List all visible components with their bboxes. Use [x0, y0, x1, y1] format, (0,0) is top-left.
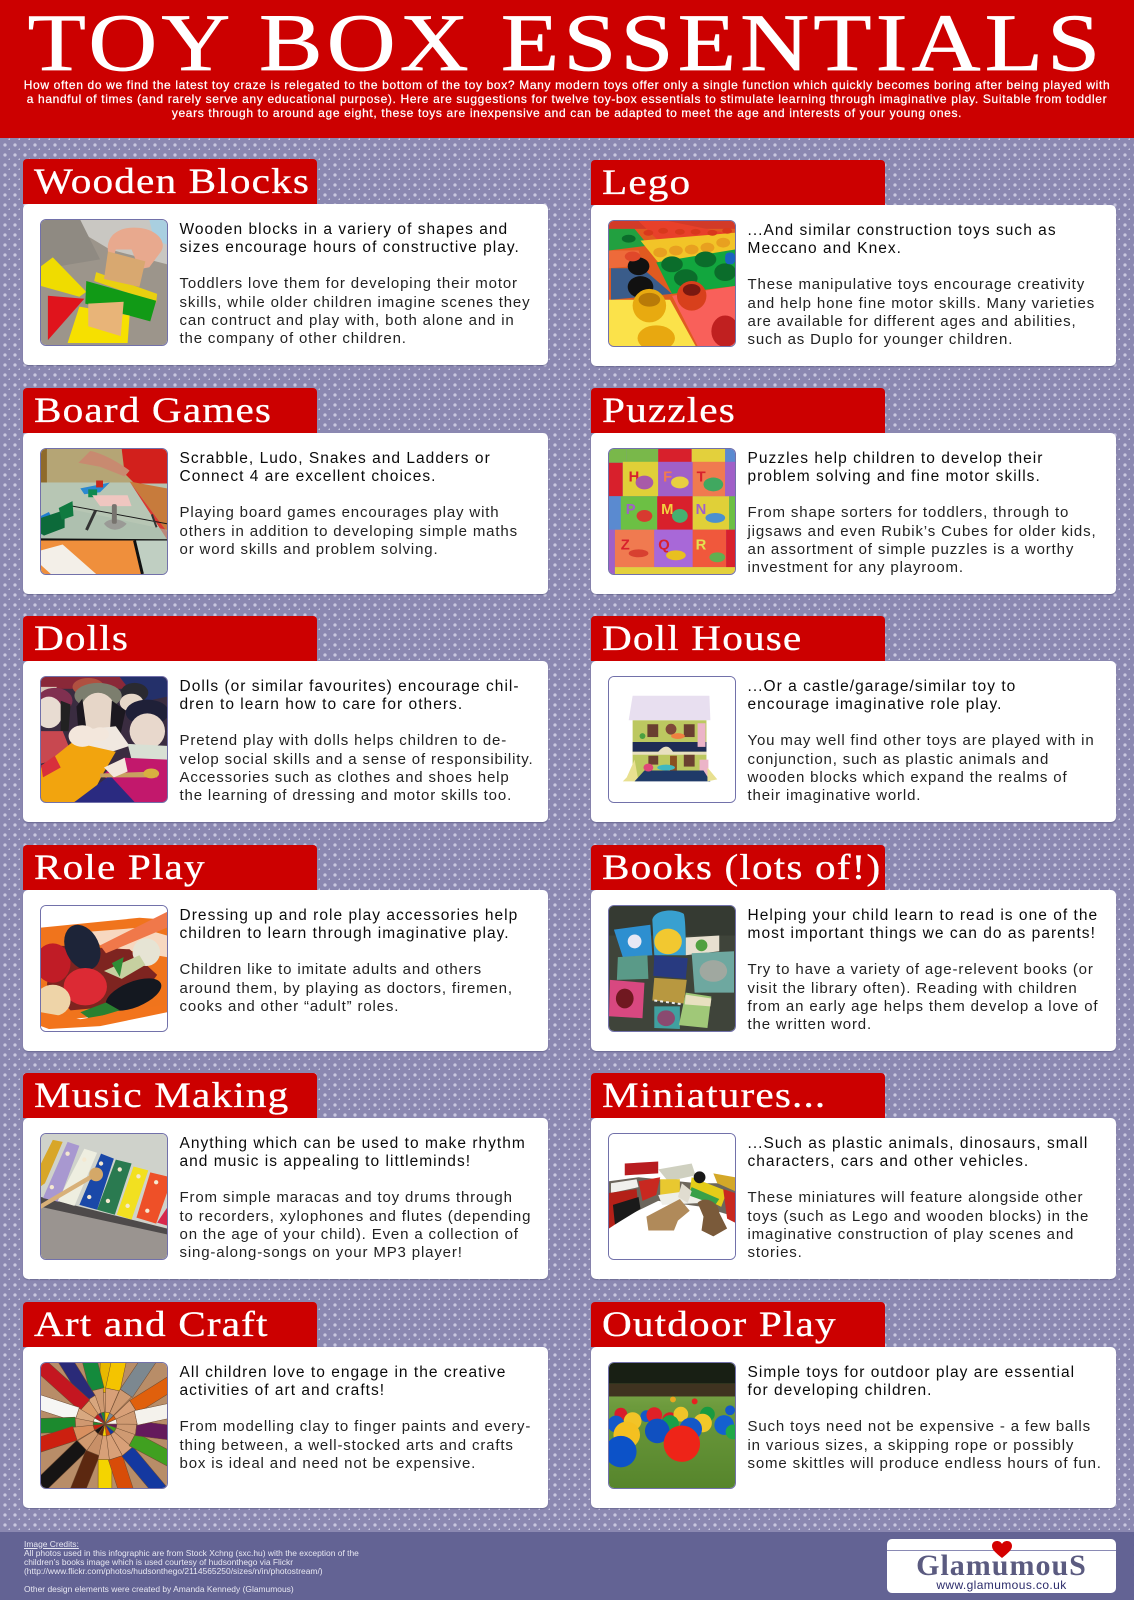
text: Miniatures: stories.: [748, 1244, 803, 1261]
text: Books: most important things we can do as parents!: [748, 925, 1096, 942]
text: Miniatures: ...Such as plastic animals, dinosaurs, small: [748, 1134, 1088, 1152]
text: Art and Craft: thing between, a well-stocked arts and crafts: [180, 1437, 514, 1454]
text: Board Games: Playing board games encourages play with: [180, 504, 500, 521]
photo: foam puzzle mat: M: [661, 502, 673, 518]
text: Music Making: [180, 1134, 531, 1261]
intro text: years through to around age eight, these toys are inexpensive and can be adapted to meet the age and interests of your young ones.: [172, 106, 962, 120]
heading: Books (lots of!): Books (lots of!): [602, 847, 881, 887]
text: Role Play: Children like to imitate adults and others: [180, 961, 482, 978]
heading: Dolls: Dolls: [34, 618, 129, 658]
text: Music Making: on the age of your child). Even a collection of: [180, 1226, 519, 1243]
text: Dolls: Accessories such as clothes and shoes help: [180, 769, 510, 786]
photo: children's books: [608, 905, 736, 1032]
text: Music Making: From simple maracas and toy drums through: [180, 1189, 513, 1206]
photo: xylophone: [40, 1133, 168, 1260]
photo: balls on grass: [608, 1362, 736, 1489]
text: Miniatures: These miniatures will feature alongside other: [748, 1189, 1083, 1206]
heading: Wooden Blocks: Wooden Blocks: [34, 161, 310, 201]
text: Board Games: others in addition to developing simple maths: [180, 523, 518, 540]
heading: Dolls: [23, 616, 317, 661]
text: Wooden Blocks: can contruct and play with, both alone and in: [180, 312, 515, 329]
image credits: children’s books image which is used courtesy of hudsonthego via Flickr: [24, 1557, 293, 1567]
text: Dolls: Dolls (or similar favourites) encourage chil-: [180, 678, 520, 694]
text: Art and Craft: [180, 1364, 531, 1472]
panel: Art and Craft: [22, 1302, 548, 1510]
image credits: [24, 1538, 359, 1594]
text: Miniatures: toys (such as Lego and wooden blocks) in the: [748, 1208, 1089, 1225]
heading: Lego: [591, 160, 885, 205]
text: Art and Craft: All children love to engage in the creative: [180, 1364, 506, 1380]
panel: Books: [590, 845, 1116, 1052]
intro text: a handful of times (and rarely serve any educational purpose). Here are suggestions for twelve toy-box essentials to stimulate learning through imaginative play. Suitable from toddler: [27, 92, 1107, 106]
photo: wooden blocks: [40, 219, 168, 346]
photo: foam puzzle mat: H: [629, 469, 639, 485]
text: Outdoor Play: [748, 1364, 1102, 1472]
logo: Glamumous: [887, 1539, 1116, 1593]
photo: foam puzzle mat: P: [626, 502, 636, 518]
photo: dolls: [40, 676, 168, 803]
text: Dolls: [180, 678, 534, 804]
text: Puzzles: an assortment of simple puzzles is a worthy: [748, 541, 1074, 558]
text: Board Games: or word skills and problem solving.: [180, 541, 439, 558]
text: Role Play: around them, by playing as doctors, firemen,: [180, 980, 513, 997]
footer: [0, 1532, 1134, 1600]
text: Puzzles: [747, 450, 1096, 576]
panel: Board Games: [22, 388, 548, 596]
panel: Dolls: [22, 616, 548, 824]
heading: Lego: Lego: [602, 162, 691, 202]
panel: Puzzles: [590, 388, 1116, 596]
text: Lego: and help hone fine motor skills. Many varieties: [748, 295, 1095, 312]
photo: board game: [40, 448, 168, 575]
text: Puzzles: From shape sorters for toddlers, through to: [748, 504, 1069, 521]
heading: Board Games: Board Games: [34, 390, 272, 430]
text: Music Making: sing-along-songs on your MP3 player!: [180, 1244, 463, 1261]
text: Wooden Blocks: sizes encourage hours of constructive play.: [180, 239, 520, 256]
panel: Outdoor Play: [590, 1302, 1116, 1510]
text: Role Play: cooks and other “adult” roles.: [180, 998, 399, 1015]
text: Outdoor Play: for developing children.: [748, 1382, 932, 1399]
text: Board Games: [180, 450, 518, 558]
photo: play food basket: [40, 905, 168, 1032]
text: Miniatures: imaginative construction of play scenes and: [748, 1226, 1074, 1243]
text: Books: visit the library often). Reading with children: [748, 980, 1078, 997]
image credits: Other design elements were created by Amanda Kennedy (Glamumous): [24, 1584, 294, 1594]
heading: Outdoor Play: Outdoor Play: [602, 1304, 837, 1344]
panel: Lego: [590, 160, 1116, 368]
text: Art and Craft: box is ideal and need not be expensive.: [180, 1455, 476, 1472]
photo: foam puzzle mat: [608, 448, 736, 575]
text: Miniatures: [748, 1134, 1089, 1261]
text: Dolls: dren to learn how to care for others.: [180, 696, 463, 713]
text: Doll House: encourage imaginative role play.: [748, 696, 1002, 713]
text: Doll House: wooden blocks which expand the realms of: [748, 769, 1068, 786]
text: Outdoor Play: Such toys need not be expensive - a few balls: [748, 1418, 1091, 1435]
text: Outdoor Play: Simple toys for outdoor play are essential: [748, 1364, 1075, 1380]
text: Puzzles: investment for any playroom.: [748, 559, 964, 576]
text: Wooden Blocks: Wooden blocks in a variery of shapes and: [180, 220, 508, 238]
text: Role Play: Dressing up and role play accessories help: [180, 906, 518, 924]
header banner: [0, 0, 1134, 138]
text: Outdoor Play: some skittles will produce endless hours of fun.: [748, 1455, 1102, 1472]
photo: toy cars and animals: [608, 1133, 736, 1260]
text: Doll House: their imaginative world.: [748, 787, 921, 804]
text: Books: from an early age helps them develop a love of: [748, 998, 1098, 1015]
text: Lego: ...And similar construction toys such as: [748, 222, 1057, 238]
heading: Role Play: [23, 845, 317, 890]
text: Books: Helping your child learn to read is one of the: [748, 906, 1098, 924]
text: Lego: These manipulative toys encourage creativity: [748, 276, 1085, 293]
photo: foam puzzle mat: F: [663, 469, 672, 485]
text: Puzzles: jigsaws and even Rubik’s Cubes for older kids,: [748, 523, 1096, 540]
text: Music Making: Anything which can be used to make rhythm: [180, 1134, 526, 1152]
heading: Puzzles: Puzzles: [602, 390, 736, 430]
heading: Miniatures...: [591, 1073, 885, 1118]
text: Dolls: velop social skills and a sense of responsibility.: [180, 751, 534, 768]
photo: foam puzzle mat: Q: [658, 537, 670, 553]
heading: Role Play: Role Play: [34, 847, 206, 887]
text: Dolls: the learning of dressing and motor skills too.: [180, 787, 512, 804]
text: Role Play: children to learn through imaginative play.: [180, 925, 510, 942]
heading: Doll House: [591, 616, 885, 661]
heading: Miniatures...: Miniatures...: [602, 1075, 826, 1115]
text: Wooden Blocks: [180, 220, 530, 347]
heading: Art and Craft: Art and Craft: [34, 1304, 269, 1344]
photo: foam puzzle mat: Z: [621, 537, 630, 553]
photo: coloured pencils: [40, 1362, 168, 1489]
text: Doll House: ...Or a castle/garage/similar toy to: [748, 678, 1016, 694]
text: Dolls: Pretend play with dolls helps children to de-: [180, 732, 507, 749]
text: Board Games: Scrabble, Ludo, Snakes and Ladders or: [180, 450, 491, 466]
intro text: [24, 78, 1110, 120]
image credits: (http://www.flickr.com/photos/hudsonthego/2114565250/sizes/n/in/photostream/): [24, 1566, 323, 1576]
text: Music Making: and music is appealing to littleminds!: [180, 1153, 471, 1170]
logo name: GlamumouS: [916, 1549, 1087, 1582]
heading: Doll House: Doll House: [602, 618, 802, 658]
text: Books: Try to have a variety of age-relevent books (or: [748, 961, 1094, 978]
text: Doll House: You may well find other toys are played with in: [748, 732, 1095, 749]
text: Board Games: Connect 4 are excellent choices.: [180, 468, 436, 485]
text: Music Making: to recorders, xylophones and flutes (depending: [180, 1208, 531, 1225]
text: Puzzles: Puzzles help children to develop their: [748, 450, 1043, 466]
text: Miniatures: characters, cars and other vehicles.: [748, 1153, 1029, 1170]
panel: Doll House: [590, 616, 1116, 824]
image credits: All photos used in this infographic are from Stock Xchng (sxc.hu) with the exception of the: [24, 1548, 359, 1558]
intro text: How often do we find the latest toy craze is relegated to the bottom of the toy box? Many modern toys offer only a single function which quickly becomes boring after being played with: [24, 78, 1110, 92]
photo: foam puzzle mat: R: [696, 537, 707, 553]
text: Role Play: [180, 906, 518, 1015]
text: Lego: are available for different ages and abilities,: [748, 313, 1077, 330]
text: Art and Craft: From modelling clay to finger paints and every-: [180, 1418, 531, 1435]
text: Wooden Blocks: skills, while older children imagine scenes they: [180, 294, 530, 311]
text: Lego: Meccano and Knex.: [748, 240, 902, 257]
photo: foam puzzle mat: N: [696, 502, 706, 518]
text: Wooden Blocks: the company of other children.: [180, 330, 407, 347]
panel: Wooden Blocks: [22, 159, 548, 366]
panel: Music Making: [22, 1073, 548, 1280]
image credits: Image Credits:: [24, 1538, 79, 1548]
text: Doll House: [748, 678, 1095, 804]
heading: Music Making: Music Making: [34, 1075, 289, 1115]
text: Outdoor Play: in various sizes, a skipping rope or possibly: [748, 1437, 1074, 1454]
text: Wooden Blocks: Toddlers love them for developing their motor: [180, 275, 518, 292]
text: Art and Craft: activities of art and crafts!: [180, 1382, 385, 1399]
logo url: www.glamumous.co.uk: [936, 1578, 1067, 1592]
text: Lego: such as Duplo for younger children.: [748, 331, 1013, 348]
text: Books: [748, 906, 1098, 1033]
panel: Role Play: [22, 845, 548, 1052]
text: Puzzles: problem solving and fine motor skills.: [748, 468, 1041, 485]
photo: foam puzzle mat: T: [697, 469, 706, 485]
text: Lego: [748, 222, 1095, 348]
text: Books: the written word.: [748, 1016, 872, 1033]
text: Doll House: conjunction, such as plastic animals and: [748, 751, 1049, 768]
panel: Miniatures: [590, 1073, 1116, 1280]
heading: Puzzles: [591, 388, 885, 433]
photo: doll house: [608, 676, 736, 803]
icon: heart: [992, 1541, 1012, 1558]
photo: lego bricks: [608, 220, 736, 347]
